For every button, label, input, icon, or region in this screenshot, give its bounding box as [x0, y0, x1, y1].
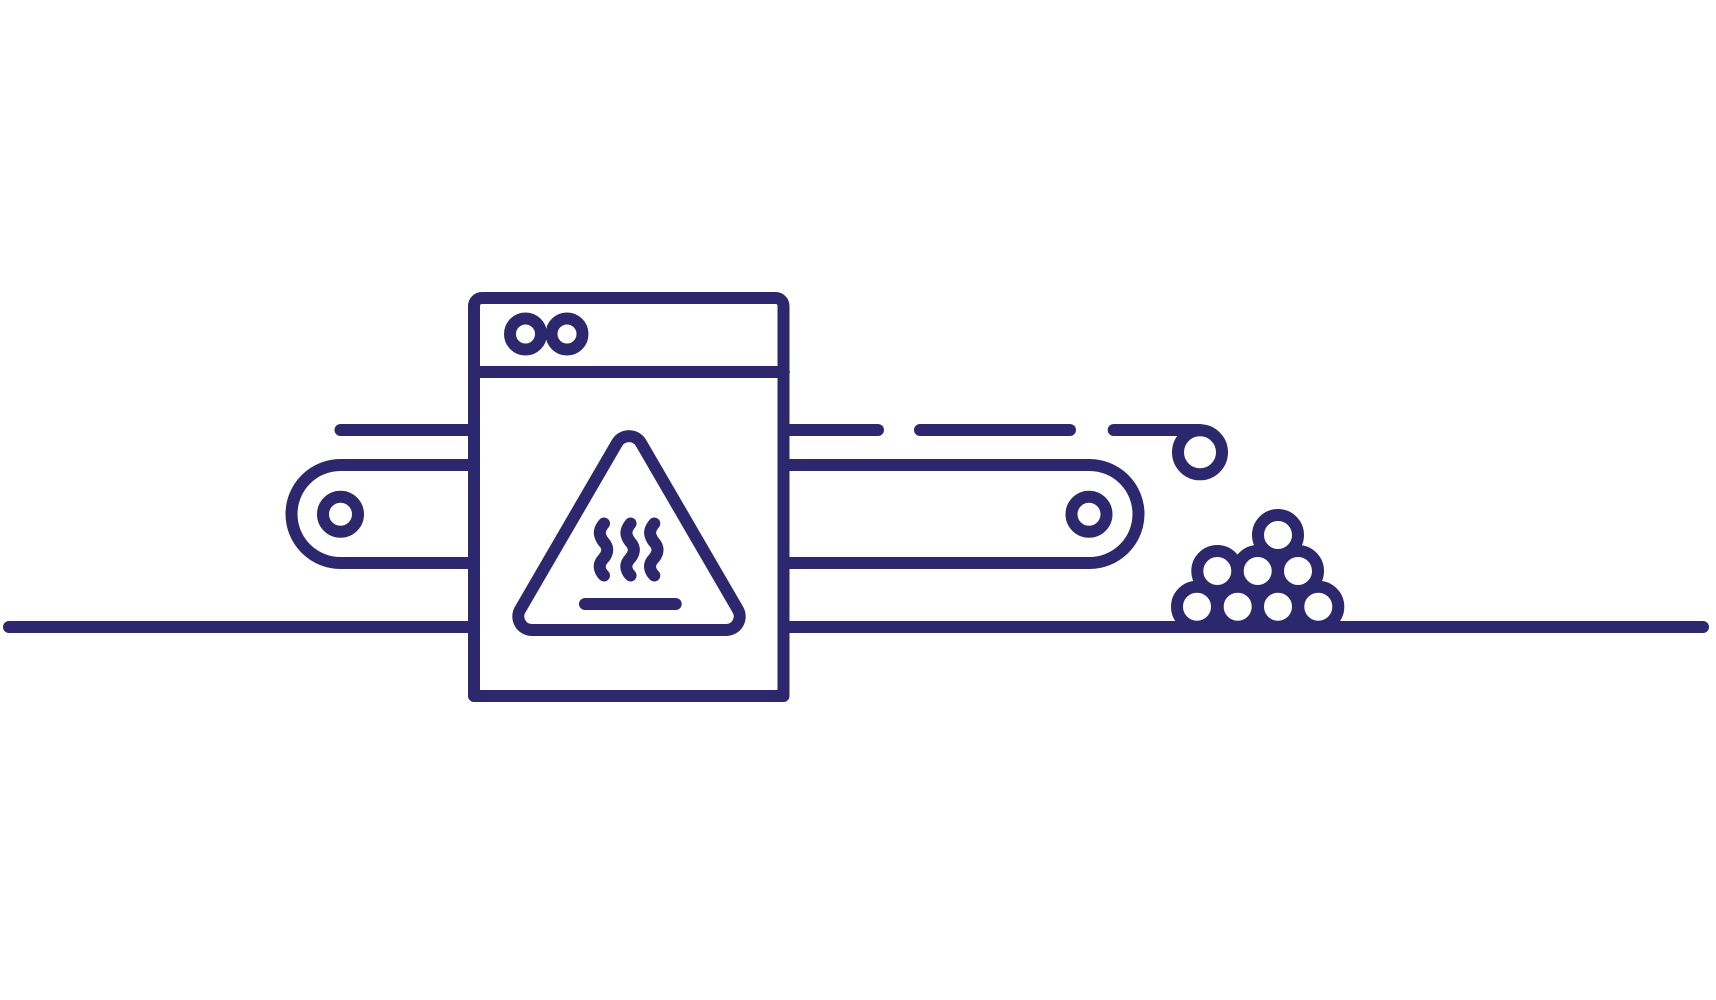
hot surface bar: [585, 598, 676, 610]
right conveyor roller: [1072, 497, 1106, 532]
right material dashes: [784, 424, 1200, 436]
left conveyor roller: [323, 497, 358, 532]
floor line: [9, 621, 1703, 633]
heat wave 1: [600, 524, 607, 576]
material end roll: [1178, 430, 1222, 474]
heat wave 3: [650, 524, 658, 576]
machine top rollers: [510, 318, 582, 350]
heat wave 2: [626, 524, 634, 576]
left top material line: [340, 424, 474, 436]
machine housing: [474, 298, 784, 696]
pile of rolls: [1177, 515, 1338, 627]
right conveyor belt: [784, 465, 1138, 563]
left conveyor belt: [292, 465, 474, 563]
icon: hot surface warning triangle: [518, 436, 740, 630]
machine divider: [474, 366, 784, 378]
